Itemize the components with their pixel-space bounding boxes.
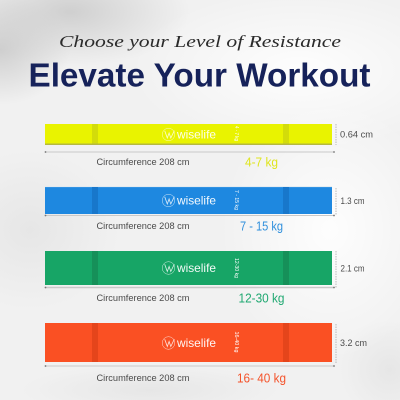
band label: 4 - 7 kg <box>233 126 239 141</box>
band label: 12-30 kg <box>233 258 239 278</box>
logo: wiselife: wiselife <box>176 194 216 208</box>
weight: 16-40 kg: 16- 40 kg <box>237 370 286 386</box>
band: blue <box>45 186 332 214</box>
thickness marker <box>336 124 373 145</box>
thickness marker <box>336 188 365 215</box>
weight: 7-15 kg: 7 - 15 kg <box>240 218 283 234</box>
thickness marker <box>336 251 365 288</box>
panel: red band 16-40 kg <box>45 323 367 386</box>
circumference line: Circumference 208 cm <box>96 157 190 168</box>
thickness marker: 0.64 cm <box>340 130 373 140</box>
logo: wiselife: wiselife <box>176 128 216 142</box>
circumference line: Circumference 208 cm <box>96 373 190 384</box>
panel: blue band 7-15 kg <box>45 186 365 234</box>
thickness marker: 3.2 cm <box>340 338 367 349</box>
weight: 4-7 kg: 4-7 kg <box>245 154 278 170</box>
panel: green band 12-30 kg <box>45 251 365 306</box>
thickness marker: 1.3 cm <box>340 196 365 207</box>
subtitle: Choose your Level of Resistance <box>59 32 342 51</box>
logo: wiselife: wiselife <box>176 336 216 350</box>
title: Elevate Your Workout <box>28 58 370 94</box>
band: yellow <box>45 124 332 145</box>
thickness marker <box>336 324 367 363</box>
logo: wiselife: wiselife <box>176 261 216 275</box>
weight: 12-30 kg: 12-30 kg <box>238 290 284 306</box>
band: red <box>45 323 332 362</box>
circumference line: Circumference 208 cm <box>96 221 190 232</box>
band: green <box>45 251 332 285</box>
thickness marker: 2.1 cm <box>340 264 365 274</box>
band label: 7 - 15 kg <box>233 190 239 210</box>
circumference line: Circumference 208 cm <box>96 293 190 304</box>
panel: yellow band 4-7 kg <box>45 124 373 170</box>
band label: 16-40 kg <box>233 332 239 353</box>
